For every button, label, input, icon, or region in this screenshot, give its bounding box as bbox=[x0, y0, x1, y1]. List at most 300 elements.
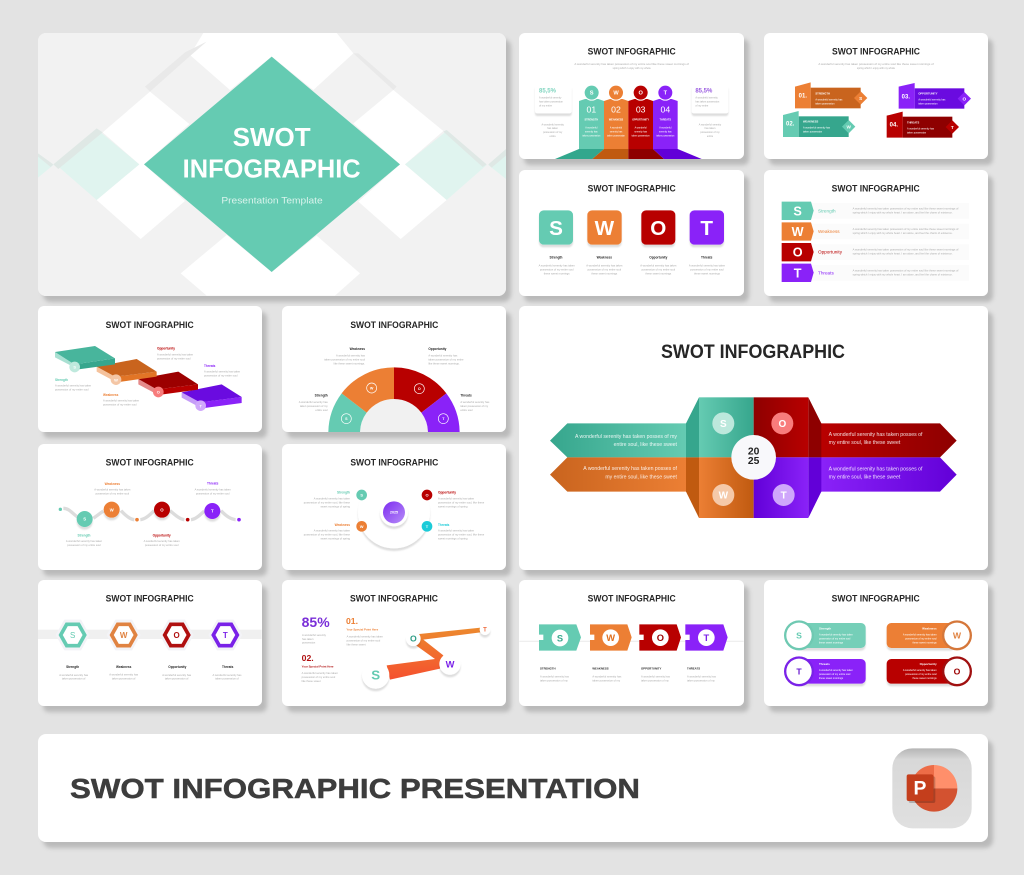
zigzag nodes: W bbox=[446, 659, 455, 669]
point 02: A wonderful serenity has taken bbox=[302, 671, 338, 675]
step S bbox=[55, 346, 115, 372]
column T: THREATS bbox=[660, 119, 671, 122]
arc labels: A wonderful serenity has bbox=[460, 400, 490, 404]
heading: SWOT INFOGRAPHIC bbox=[106, 458, 194, 468]
arc labels: entire soul bbox=[315, 408, 328, 412]
subheading bbox=[574, 63, 689, 70]
icon: PowerPoint logo bbox=[892, 748, 972, 828]
column W: taken possession bbox=[607, 135, 626, 138]
subheading: A wonderful serenity has taken possession of my entire soul like these sweet mornings of bbox=[574, 63, 689, 66]
arrow T bbox=[685, 624, 728, 651]
tile W: W bbox=[595, 217, 615, 240]
right stat box: of my entire bbox=[695, 104, 709, 107]
column O: serenity has bbox=[634, 131, 648, 134]
quadrant block: W bbox=[719, 491, 729, 502]
row S: spring which I enjoy with my whole heart. I am alone, and feel the charm of existence. bbox=[853, 211, 953, 214]
orbit nodes bbox=[356, 490, 432, 532]
panel: 3D steps slide bbox=[38, 306, 262, 432]
panel: pills slide bbox=[764, 580, 988, 706]
wave labels: possession of my entire soul bbox=[96, 492, 129, 496]
heading: SWOT INFOGRAPHIC bbox=[832, 46, 920, 56]
point 02: like these sweet bbox=[302, 679, 321, 683]
point 01 bbox=[346, 616, 383, 646]
pill S: A wonderful serenity has taken bbox=[819, 634, 853, 637]
wave labels: Weakness bbox=[105, 482, 120, 486]
tile captions: A wonderful serenity has taken bbox=[539, 263, 575, 267]
arrow: strength bbox=[550, 423, 687, 457]
tile captions: A wonderful serenity has taken bbox=[586, 263, 623, 267]
step S: S bbox=[73, 365, 76, 370]
tag 03 opportunity: O bbox=[963, 97, 967, 102]
column S: STRENGTH bbox=[584, 119, 598, 122]
right note: has taken bbox=[705, 127, 716, 130]
footer title: SWOT INFOGRAPHIC PRESENTATION bbox=[70, 773, 640, 804]
arc labels: taken possession of my bbox=[460, 404, 489, 408]
wave labels: A wonderful serenity has taken bbox=[144, 539, 180, 543]
stat 85%: possession bbox=[302, 641, 316, 645]
wave labels: A wonderful serenity has taken bbox=[195, 488, 231, 492]
orbit nodes: W bbox=[360, 524, 364, 529]
arc labels: Weakness bbox=[350, 347, 365, 351]
arc labels: A wonderful serenity has bbox=[428, 354, 458, 358]
tag 04 threats: taken possession bbox=[907, 131, 927, 134]
zigzag nodes: O bbox=[410, 634, 417, 644]
pill O: these sweet mornings bbox=[912, 677, 937, 680]
tag 01 strength: S bbox=[859, 96, 862, 101]
panel: semi-circle slide bbox=[282, 306, 513, 440]
step W bbox=[97, 359, 157, 385]
step labels: A wonderful serenity has taken bbox=[204, 370, 241, 374]
orbit labels: Strength bbox=[337, 491, 350, 495]
tag 03 opportunity: taken possession bbox=[918, 103, 938, 106]
arrow captions: THREATS bbox=[687, 667, 700, 671]
zigzag band bbox=[387, 627, 483, 680]
hero title: SWOT bbox=[233, 122, 311, 152]
wave line bbox=[63, 508, 236, 520]
arrow captions: OPPORTUNITY bbox=[641, 667, 662, 671]
arrow: weakness bbox=[550, 457, 687, 492]
hexagon captions: Threats bbox=[222, 665, 234, 669]
stat 85%: has taken bbox=[302, 637, 314, 641]
wave labels: possession of my entire soul bbox=[196, 492, 230, 496]
left stat box: of my entire bbox=[539, 104, 553, 107]
panel: orbit slide bbox=[282, 444, 506, 570]
column O: OPPORTUNITY bbox=[632, 120, 650, 122]
hero subtitle: Presentation Template bbox=[221, 196, 323, 206]
hexagon captions: Weakness bbox=[116, 665, 132, 669]
tag 04 threats bbox=[887, 112, 959, 138]
panel: hero cover slide bbox=[38, 33, 506, 296]
point 02: Your Special Point Here bbox=[302, 665, 334, 669]
hexagon captions: taken possession of bbox=[112, 676, 136, 680]
arrow T: T bbox=[703, 633, 709, 643]
tag 02 weakness: A wonderful serenity has bbox=[803, 127, 831, 130]
pill T: A wonderful serenity has taken bbox=[819, 669, 853, 672]
step O bbox=[138, 372, 198, 397]
tag 01 strength bbox=[795, 82, 867, 108]
orbit labels: sweet mornings of spring bbox=[320, 504, 351, 508]
wave labels: possession of my entire soul bbox=[67, 543, 101, 547]
tile captions: possession of my entire soul bbox=[642, 267, 675, 271]
orbit nodes: T bbox=[426, 524, 429, 529]
left stat box bbox=[535, 85, 572, 113]
step labels: Threats bbox=[204, 364, 216, 368]
tag 04 threats: A wonderful serenity has bbox=[907, 127, 935, 130]
tag 02 weakness: taken possession bbox=[803, 131, 823, 134]
panel: wave timeline slide bbox=[38, 444, 262, 570]
hexagon captions: Strength bbox=[66, 665, 79, 669]
orbit labels: possession of my entire soul, like these bbox=[304, 532, 351, 536]
left note: possession of my bbox=[543, 131, 563, 134]
tile captions: Threats bbox=[701, 255, 713, 259]
orbit labels: A wonderful serenity has taken bbox=[314, 496, 351, 500]
column T: A wonderful bbox=[659, 127, 672, 130]
right note: entire bbox=[707, 135, 714, 138]
orbit labels: A wonderful serenity has taken bbox=[438, 528, 475, 532]
tile captions: these sweet mornings bbox=[645, 271, 672, 275]
orbit labels: Weakness bbox=[335, 523, 350, 527]
zigzag nodes bbox=[362, 624, 490, 689]
tile W bbox=[587, 210, 622, 245]
orbit labels bbox=[304, 491, 485, 540]
step labels: A wonderful serenity has taken bbox=[157, 352, 194, 356]
hexagon S: S bbox=[70, 631, 75, 640]
row O: A wonderful serenity has taken possession of my entire soul like these sweet mornings of bbox=[853, 249, 959, 252]
pill T: these sweet mornings bbox=[819, 677, 844, 680]
tile captions: Weakness bbox=[597, 255, 612, 259]
tile O bbox=[641, 210, 675, 245]
tag 01 strength: taken possession bbox=[815, 103, 835, 106]
hexagon captions: Opportunity bbox=[168, 665, 187, 669]
arc labels: taken possession of my entire soul bbox=[324, 357, 365, 361]
tile S: S bbox=[549, 217, 563, 240]
tile captions: possession of my entire soul bbox=[588, 267, 621, 271]
tile T bbox=[690, 210, 724, 245]
stat 85%: 85% bbox=[302, 614, 330, 630]
orbit labels: sweet mornings of spring bbox=[438, 504, 468, 508]
center year badge: 25 bbox=[748, 456, 760, 467]
wave labels bbox=[66, 482, 231, 547]
quadrant block: O bbox=[778, 419, 786, 430]
panel: featured quadrant slide bbox=[519, 306, 988, 570]
heading: SWOT INFOGRAPHIC bbox=[588, 594, 676, 604]
hexagon captions bbox=[59, 665, 242, 681]
semi-circle chart: T bbox=[442, 417, 445, 421]
step labels: A wonderful serenity has taken bbox=[103, 399, 140, 403]
panel: columns slide bbox=[519, 33, 744, 159]
arrow: weakness: my entire soul, like these sweet bbox=[605, 474, 678, 480]
wave labels: A wonderful serenity has taken bbox=[66, 539, 103, 543]
tile captions: these sweet mornings bbox=[591, 271, 618, 275]
arrow O: O bbox=[657, 633, 664, 643]
panel: square tiles slide bbox=[519, 170, 744, 296]
tag 04 threats: 04. bbox=[890, 123, 898, 129]
pill O: Opportunity bbox=[920, 662, 937, 666]
arrow captions: taken possession of my bbox=[540, 679, 568, 683]
quadrant block: T bbox=[781, 491, 787, 502]
row W: A wonderful serenity has taken possession of my entire soul like these sweet mornings of bbox=[853, 228, 959, 231]
step labels: possession of my entire soul bbox=[55, 387, 89, 391]
right stat box bbox=[692, 85, 728, 113]
arrow captions: STRENGTH bbox=[540, 667, 556, 671]
pill O: O bbox=[954, 666, 961, 676]
tag 01 strength: 01. bbox=[799, 94, 807, 100]
tag 04 threats: T bbox=[951, 125, 954, 130]
panel: arrow chain slide bbox=[519, 580, 744, 706]
hexagon T: T bbox=[223, 631, 228, 640]
row O: Opportunity bbox=[818, 250, 843, 255]
pill S bbox=[784, 620, 866, 650]
arc labels: like these sweet mornings. bbox=[334, 361, 365, 365]
tag 03 opportunity: A wonderful serenity has bbox=[918, 99, 946, 102]
column T bbox=[653, 85, 678, 149]
pill S: these sweet mornings bbox=[819, 642, 844, 645]
heading: SWOT INFOGRAPHIC bbox=[832, 594, 920, 604]
left note: entire bbox=[550, 135, 556, 138]
tile O: O bbox=[650, 217, 666, 240]
column W: A wonderful bbox=[610, 127, 623, 130]
tag 02 weakness: WEAKNESS bbox=[803, 120, 819, 124]
column O bbox=[628, 85, 653, 149]
quadrant block: S bbox=[720, 419, 727, 430]
semi-circle chart bbox=[328, 367, 460, 432]
arrow captions: A wonderful serenity has bbox=[592, 675, 622, 679]
quadrant block bbox=[686, 397, 821, 518]
column T: serenity has bbox=[659, 131, 672, 134]
semi-circle chart: S bbox=[345, 417, 348, 421]
tile captions: Opportunity bbox=[649, 255, 668, 259]
arrow W bbox=[590, 624, 632, 651]
center year badge bbox=[731, 435, 776, 480]
column W: WEAKNESS bbox=[609, 119, 624, 122]
pill S: S bbox=[796, 630, 802, 640]
arrow captions: taken possession of my bbox=[592, 679, 621, 683]
subheading: A wonderful serenity has taken possession of my entire soul like these sweet mornings of bbox=[818, 63, 934, 66]
hexagon O bbox=[160, 620, 194, 650]
tile captions: Strength bbox=[550, 255, 563, 259]
row T: Threats bbox=[818, 270, 834, 275]
pill W: possession of my entire soul bbox=[905, 638, 937, 641]
tile T: T bbox=[700, 217, 713, 240]
arc labels: A wonderful serenity has bbox=[299, 400, 328, 404]
hexagon S bbox=[56, 620, 90, 650]
point 01: Your Special Point Here bbox=[346, 628, 379, 632]
wave nodes bbox=[59, 502, 241, 527]
semi-circle chart: W bbox=[370, 386, 374, 390]
hexagon captions: taken possession of bbox=[165, 677, 189, 681]
point 01: possession of my entire soul bbox=[347, 638, 381, 642]
tag 02 weakness bbox=[783, 111, 855, 137]
hexagon W: W bbox=[120, 631, 128, 640]
heading: SWOT INFOGRAPHIC bbox=[350, 320, 439, 330]
wave nodes: S bbox=[83, 517, 86, 522]
arrow: threats: my entire soul, like these sweet bbox=[829, 475, 901, 481]
pill W: Weakness bbox=[922, 627, 937, 631]
row W: spring which I enjoy with my whole heart. I am alone, and feel the charm of existence. bbox=[853, 232, 953, 235]
arrow: opportunity: my entire soul, like these sweet bbox=[829, 440, 901, 446]
step labels: Strength bbox=[55, 378, 68, 382]
arc labels: Strength bbox=[315, 394, 328, 398]
column W bbox=[604, 85, 628, 149]
tile S bbox=[539, 210, 573, 245]
point 01: 01. bbox=[346, 616, 358, 626]
hexagon W bbox=[107, 620, 141, 650]
column S bbox=[579, 85, 604, 149]
row T: A wonderful serenity has taken possession of my entire soul like these sweet mornings of bbox=[853, 269, 959, 272]
hero title line 2: INFOGRAPHIC bbox=[183, 153, 361, 183]
column T: T bbox=[664, 91, 668, 97]
column O: O bbox=[638, 91, 643, 97]
row S: A wonderful serenity has taken possession of my entire soul like these sweet mornings of bbox=[853, 207, 959, 210]
row O bbox=[782, 243, 969, 261]
wave nodes: O bbox=[160, 507, 164, 512]
row W bbox=[782, 222, 969, 241]
subheading: spring which I enjoy with my whole bbox=[857, 67, 896, 70]
pill S: possession of my entire soul bbox=[819, 638, 851, 641]
point 02: possession of my entire soul bbox=[302, 675, 336, 679]
step W: W bbox=[114, 377, 118, 382]
tile captions: possession of my entire soul bbox=[540, 267, 574, 271]
column W: serenity has bbox=[610, 131, 623, 134]
row T bbox=[782, 264, 969, 282]
point 01: like these sweet bbox=[347, 642, 366, 646]
arrow: strength: entire soul, like these sweet bbox=[614, 442, 678, 448]
center orb: 2025 bbox=[390, 511, 398, 515]
wave labels: A wonderful serenity has taken bbox=[94, 488, 131, 492]
panel: folded tags slide bbox=[764, 33, 988, 159]
heading: SWOT INFOGRAPHIC bbox=[106, 594, 194, 604]
tag 01 strength: STRENGTH bbox=[815, 91, 830, 95]
pill O: possession of my entire soul bbox=[905, 673, 937, 676]
orbit labels: possession of my entire soul, like these bbox=[304, 500, 351, 504]
step T: T bbox=[199, 403, 202, 408]
left note: A wonderful serenity bbox=[541, 123, 565, 126]
wave nodes: W bbox=[110, 507, 115, 512]
hexagon captions: A wonderful serenity has bbox=[213, 673, 242, 677]
hexagon captions: A wonderful serenity has bbox=[109, 672, 139, 676]
tile captions: A wonderful serenity has taken bbox=[640, 263, 677, 267]
panel: list rows slide bbox=[764, 170, 988, 296]
orbit labels: Opportunity bbox=[438, 491, 456, 495]
subheading bbox=[818, 63, 934, 70]
tag 03 opportunity: 03. bbox=[902, 94, 910, 100]
arrow: opportunity bbox=[821, 423, 957, 457]
column W: 02 bbox=[611, 104, 621, 114]
column O: A wonderful bbox=[635, 127, 647, 130]
heading: SWOT INFOGRAPHIC bbox=[106, 320, 194, 330]
orbit nodes: S bbox=[360, 493, 363, 498]
right note: A wonderful serenity bbox=[699, 123, 722, 126]
stat 85% bbox=[302, 614, 330, 645]
step labels: Weakness bbox=[103, 393, 119, 397]
hexagon O: O bbox=[174, 631, 180, 640]
point 02 bbox=[302, 653, 338, 683]
arrow captions: taken possession of my bbox=[641, 679, 669, 683]
arrow captions bbox=[540, 667, 717, 683]
heading: SWOT INFOGRAPHIC bbox=[661, 342, 845, 363]
right stat box: 85,5% bbox=[695, 89, 713, 95]
arrow: threats: A wonderful serenity has taken posses of bbox=[829, 467, 923, 473]
zigzag nodes: S bbox=[371, 668, 380, 683]
arrow: weakness: A wonderful serenity has taken posses of bbox=[583, 466, 678, 472]
row S bbox=[782, 202, 969, 220]
arc labels: taken possession of my bbox=[300, 404, 328, 408]
wave nodes: T bbox=[211, 509, 214, 514]
left stat box: 85,5% bbox=[539, 89, 557, 95]
orbit nodes: O bbox=[425, 493, 429, 498]
column T: 04 bbox=[661, 104, 670, 114]
left stat box: A wonderful serenity bbox=[539, 97, 562, 100]
orbit labels: possession of my entire soul, like these bbox=[438, 500, 485, 504]
heading: SWOT INFOGRAPHIC bbox=[350, 458, 439, 468]
green diamond bbox=[144, 57, 400, 272]
pill W bbox=[887, 620, 972, 650]
subheading: spring which I enjoy with my whole bbox=[613, 67, 651, 70]
wave labels: Strength bbox=[78, 533, 91, 537]
pill S: Strength bbox=[819, 627, 831, 631]
stat 85%: A wonderful serenity bbox=[302, 633, 327, 637]
pill W: A wonderful serenity has taken bbox=[903, 634, 937, 637]
step labels: possession of my entire soul bbox=[157, 356, 191, 360]
arrow captions: A wonderful serenity has bbox=[641, 675, 671, 679]
step O: O bbox=[157, 390, 160, 395]
pill T: Threats bbox=[819, 662, 830, 666]
step labels: Opportunity bbox=[157, 347, 175, 351]
point 02: 02. bbox=[302, 653, 314, 663]
step labels bbox=[55, 347, 241, 407]
right note: possession of my bbox=[700, 131, 720, 134]
arc labels: A wonderful serenity has bbox=[336, 354, 366, 358]
column S: 01 bbox=[587, 104, 596, 114]
row O: spring which I enjoy with my whole heart. I am alone, and feel the charm of existence. bbox=[853, 253, 953, 256]
row O: O bbox=[793, 246, 803, 260]
heading: SWOT INFOGRAPHIC bbox=[832, 184, 920, 194]
column S: S bbox=[590, 91, 594, 97]
wave labels: Threats bbox=[207, 482, 219, 486]
hexagon captions: taken possession of bbox=[62, 677, 86, 681]
orbit labels: sweet mornings of spring bbox=[438, 536, 468, 540]
column O: 03 bbox=[636, 104, 646, 114]
arc labels: entire soul bbox=[460, 408, 473, 412]
panel: footer banner bbox=[38, 734, 988, 842]
heading: SWOT INFOGRAPHIC bbox=[588, 46, 676, 56]
hexagon captions: A wonderful serenity has bbox=[162, 673, 192, 677]
hexagon captions: A wonderful serenity has bbox=[59, 673, 89, 677]
center orb bbox=[380, 498, 408, 526]
icon: PowerPoint logo: P bbox=[914, 778, 927, 799]
tag 03 opportunity bbox=[899, 83, 971, 109]
tag 03 opportunity: OPPORTUNITY bbox=[918, 91, 938, 95]
step labels: A wonderful serenity has taken bbox=[55, 383, 92, 387]
tag 04 threats: THREATS bbox=[907, 120, 920, 124]
arc labels: taken possession of my entire bbox=[428, 357, 464, 361]
left note: has taken bbox=[547, 127, 559, 130]
tile captions: these sweet mornings bbox=[544, 271, 570, 275]
orbit labels: A wonderful serenity has taken bbox=[438, 496, 475, 500]
hexagon captions: taken possession of bbox=[215, 677, 239, 681]
pill O bbox=[887, 656, 972, 686]
row W: W bbox=[792, 225, 804, 239]
column S: A wonderful bbox=[585, 127, 598, 130]
column W: W bbox=[613, 91, 619, 97]
column O: taken possession bbox=[632, 135, 650, 138]
column S: taken possession bbox=[582, 135, 601, 138]
hexagon T bbox=[208, 620, 242, 650]
column T: taken possession bbox=[656, 135, 675, 138]
orbit labels: Threats bbox=[438, 523, 450, 527]
arrow captions: A wonderful serenity has bbox=[540, 675, 570, 679]
left stat box: has taken possession bbox=[539, 100, 564, 103]
